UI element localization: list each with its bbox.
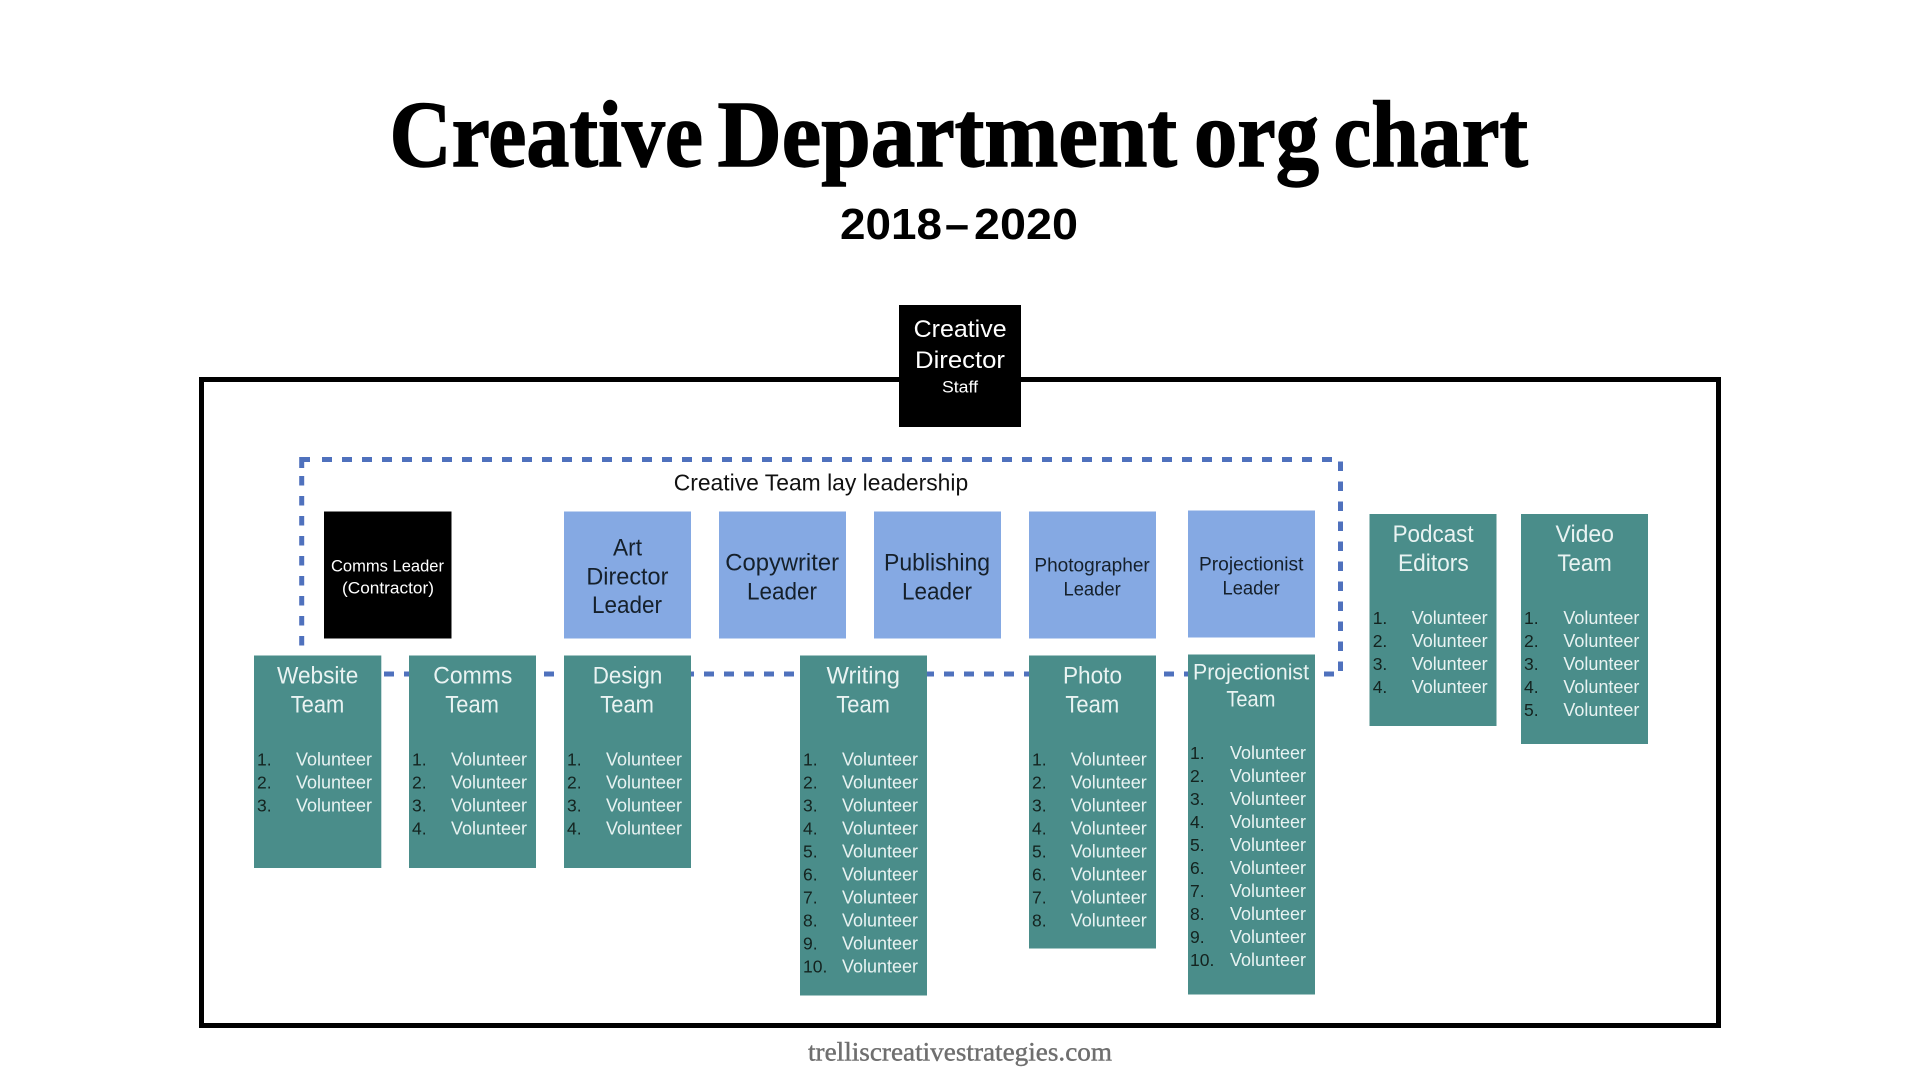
panel: Photo Team: Volunteer bbox=[1071, 841, 1147, 862]
panel: Writing Team: 5. bbox=[803, 842, 818, 862]
panel: Video Team: Volunteer bbox=[1563, 676, 1639, 697]
box: Projectionist Leader: Projectionist bbox=[1199, 555, 1304, 576]
panel: Photo Team: 5. bbox=[1032, 842, 1047, 862]
panel: Writing Team: Volunteer bbox=[842, 841, 918, 862]
panel: Podcast Editors: Volunteer bbox=[1412, 630, 1488, 651]
panel: Writing Team: Volunteer bbox=[842, 772, 918, 793]
panel: Video Team: 2. bbox=[1524, 631, 1539, 651]
panel: Design Team: 4. bbox=[567, 819, 582, 839]
panel: Photo Team: 6. bbox=[1032, 865, 1047, 885]
panel: Projectionist Team: Volunteer bbox=[1230, 903, 1306, 924]
box: Projectionist Leader: Leader bbox=[1222, 579, 1280, 600]
panel: Photo Team: Volunteer bbox=[1071, 887, 1147, 908]
subtitle: years bbox=[840, 200, 1078, 249]
panel: Design Team: Volunteer bbox=[606, 818, 682, 839]
panel: Podcast Editors: Editors bbox=[1398, 550, 1469, 577]
box: Creative Director: Staff bbox=[942, 378, 978, 396]
panel: Writing Team: 3. bbox=[803, 796, 818, 816]
box: Art Director Leader: Director bbox=[586, 563, 668, 590]
panel: Comms Team: Team bbox=[445, 691, 499, 718]
panel: Design Team bbox=[564, 656, 691, 868]
title: Department bbox=[718, 83, 1177, 187]
box: Comms Leader bbox=[324, 512, 452, 638]
panel: Website Team: Volunteer bbox=[296, 772, 372, 793]
panel: Writing Team: Volunteer bbox=[842, 956, 918, 977]
box: Creative Director bbox=[899, 305, 1021, 427]
subtitle: years: – bbox=[945, 200, 969, 249]
panel: Design Team: 1. bbox=[567, 750, 582, 770]
panel: Writing Team: 4. bbox=[803, 819, 818, 839]
panel: Projectionist Team bbox=[1188, 654, 1315, 994]
panel: Projectionist Team: Volunteer bbox=[1230, 880, 1306, 901]
title bbox=[390, 83, 1528, 187]
panel: Website Team: Website bbox=[277, 662, 358, 689]
panel: Podcast Editors: 1. bbox=[1373, 608, 1387, 628]
panel: Photo Team bbox=[1029, 656, 1156, 948]
panel: Projectionist Team: Volunteer bbox=[1230, 926, 1306, 947]
footer: website: trelliscreativestrategies.com bbox=[808, 1038, 1112, 1066]
panel: Podcast Editors: 2. bbox=[1373, 631, 1387, 651]
panel: Photo Team: 1. bbox=[1032, 750, 1047, 770]
panel: Design Team: Volunteer bbox=[606, 772, 682, 793]
panel: Video Team: Volunteer bbox=[1563, 653, 1639, 674]
box: Publishing Leader: Publishing bbox=[884, 550, 990, 576]
panel: Projectionist Team: 4. bbox=[1190, 812, 1205, 832]
panel: Comms Team: Volunteer bbox=[451, 772, 527, 793]
panel: Writing Team: Volunteer bbox=[842, 910, 918, 931]
panel: Comms Team: Comms bbox=[433, 662, 512, 689]
panel: Website Team: 3. bbox=[257, 796, 272, 816]
panel: Video Team: Volunteer bbox=[1563, 607, 1639, 628]
panel: Writing Team: Volunteer bbox=[842, 818, 918, 839]
title: Creative bbox=[390, 83, 703, 187]
box: Creative Director: Director bbox=[915, 347, 1005, 374]
panel: Video Team: 5. bbox=[1524, 700, 1539, 720]
panel: Writing Team: Volunteer bbox=[842, 795, 918, 816]
panel: Photo Team: Volunteer bbox=[1071, 749, 1147, 770]
box: Copywriter Leader: Leader bbox=[747, 579, 817, 606]
panel: Photo Team: Volunteer bbox=[1071, 864, 1147, 885]
panel: Projectionist Team: Volunteer bbox=[1230, 857, 1306, 878]
panel: Comms Team: 1. bbox=[412, 750, 427, 770]
panel: Projectionist Team: 8. bbox=[1190, 904, 1205, 924]
box: Creative Director: Creative bbox=[914, 316, 1007, 343]
panel: Video Team: 4. bbox=[1524, 677, 1539, 697]
panel: Podcast Editors: Volunteer bbox=[1412, 653, 1488, 674]
box: Photographer Leader: Leader bbox=[1064, 580, 1121, 600]
subtitle: years: 2020 bbox=[974, 200, 1078, 249]
panel: Writing Team: Volunteer bbox=[842, 864, 918, 885]
panel: Writing Team: Volunteer bbox=[842, 933, 918, 954]
panel: Projectionist Team: Volunteer bbox=[1230, 765, 1306, 786]
panel: Projectionist Team: 7. bbox=[1190, 881, 1205, 901]
panel: Projectionist Team: 3. bbox=[1190, 789, 1205, 809]
panel: Photo Team: 7. bbox=[1032, 888, 1047, 908]
panel: Writing Team: 9. bbox=[803, 934, 818, 954]
panel: Photo Team: Volunteer bbox=[1071, 818, 1147, 839]
panel: Photo Team: 8. bbox=[1032, 911, 1047, 931]
panel: Photo Team: Team bbox=[1065, 691, 1119, 718]
panel: Photo Team: Volunteer bbox=[1071, 772, 1147, 793]
panel: Design Team: Volunteer bbox=[606, 749, 682, 770]
box: Copywriter Leader: Copywriter bbox=[725, 550, 839, 576]
panel: Projectionist Team: Volunteer bbox=[1230, 834, 1306, 855]
box: Copywriter Leader bbox=[719, 512, 846, 638]
panel: Video Team: Volunteer bbox=[1563, 699, 1639, 720]
panel: Photo Team: Volunteer bbox=[1071, 910, 1147, 931]
panel: Projectionist Team: Projectionist bbox=[1193, 660, 1309, 685]
box: Art Director Leader bbox=[564, 512, 691, 638]
box: Art Director Leader: Art bbox=[613, 535, 642, 562]
panel: Comms Team: Volunteer bbox=[451, 749, 527, 770]
subtitle: years: 2018 bbox=[840, 200, 942, 249]
box: Photographer Leader: Photographer bbox=[1034, 556, 1150, 576]
panel: Podcast Editors: Podcast bbox=[1393, 521, 1474, 548]
title: chart bbox=[1334, 83, 1528, 187]
panel: Website Team: Volunteer bbox=[296, 749, 372, 770]
panel: Writing Team bbox=[800, 656, 927, 996]
panel: Projectionist Team: 6. bbox=[1190, 858, 1205, 878]
panel: Projectionist Team: Volunteer bbox=[1230, 742, 1306, 763]
panel: Website Team bbox=[254, 656, 381, 868]
panel: Website Team: 1. bbox=[257, 750, 272, 770]
panel: Projectionist Team: Team bbox=[1226, 687, 1275, 712]
panel: Writing Team: Volunteer bbox=[842, 749, 918, 770]
panel: Writing Team: 7. bbox=[803, 888, 818, 908]
panel: Writing Team: Team bbox=[836, 691, 890, 718]
panel: Podcast Editors: Volunteer bbox=[1412, 607, 1488, 628]
box: Comms Leader: Comms Leader bbox=[331, 558, 445, 576]
panel: Projectionist Team: 2. bbox=[1190, 766, 1205, 786]
panel: Writing Team: 8. bbox=[803, 911, 818, 931]
panel: Writing Team: 1. bbox=[803, 750, 818, 770]
panel: Website Team: 2. bbox=[257, 773, 272, 793]
panel: Projectionist Team: 5. bbox=[1190, 835, 1205, 855]
panel: Website Team: Team bbox=[291, 691, 344, 718]
panel: Comms Team: 4. bbox=[412, 819, 427, 839]
panel: Design Team: 3. bbox=[567, 796, 582, 816]
box: Comms Leader: (Contractor) bbox=[342, 580, 434, 598]
panel: Projectionist Team: Volunteer bbox=[1230, 949, 1306, 970]
panel: Photo Team: Photo bbox=[1063, 662, 1122, 689]
panel: Writing Team: Writing bbox=[826, 662, 900, 689]
panel: Design Team: Design bbox=[593, 662, 662, 689]
panel: Design Team: 2. bbox=[567, 773, 582, 793]
panel: Photo Team: Volunteer bbox=[1071, 795, 1147, 816]
title: org bbox=[1194, 83, 1319, 187]
panel: Website Team: Volunteer bbox=[296, 795, 372, 816]
panel: Projectionist Team: 1. bbox=[1190, 743, 1205, 763]
panel: Comms Team: 2. bbox=[412, 773, 427, 793]
panel: Projectionist Team: 10. bbox=[1190, 950, 1214, 970]
panel: Podcast Editors: 4. bbox=[1373, 677, 1387, 697]
box: Photographer Leader bbox=[1029, 512, 1156, 638]
box: Publishing Leader bbox=[874, 512, 1001, 638]
box: Publishing Leader: Leader bbox=[902, 579, 972, 606]
box: Art Director Leader: Leader bbox=[592, 592, 662, 619]
panel: Writing Team: Volunteer bbox=[842, 887, 918, 908]
panel: Design Team: Team bbox=[600, 691, 654, 718]
panel: Comms Team: 3. bbox=[412, 796, 427, 816]
panel: Photo Team: 3. bbox=[1032, 796, 1047, 816]
panel: Comms Team: Volunteer bbox=[451, 795, 527, 816]
panel: Projectionist Team: Volunteer bbox=[1230, 788, 1306, 809]
panel: Photo Team: 2. bbox=[1032, 773, 1047, 793]
panel: Video Team: 3. bbox=[1524, 654, 1539, 674]
panel: Podcast Editors bbox=[1370, 514, 1496, 726]
panel: Design Team: Volunteer bbox=[606, 795, 682, 816]
panel: Writing Team: 6. bbox=[803, 865, 818, 885]
dashed box: Creative Team lay leadership bbox=[302, 460, 1341, 674]
panel: Writing Team: 10. bbox=[803, 957, 827, 977]
panel: Podcast Editors: Volunteer bbox=[1412, 676, 1488, 697]
panel: Video Team: Video bbox=[1556, 521, 1614, 548]
panel: Projectionist Team: 9. bbox=[1190, 927, 1205, 947]
panel: Video Team bbox=[1521, 514, 1648, 744]
panel: Podcast Editors: 3. bbox=[1373, 654, 1387, 674]
panel: Comms Team bbox=[409, 656, 536, 868]
panel: Photo Team: 4. bbox=[1032, 819, 1047, 839]
panel: Writing Team: 2. bbox=[803, 773, 818, 793]
panel: Video Team: Team bbox=[1557, 550, 1612, 577]
panel: Comms Team: Volunteer bbox=[451, 818, 527, 839]
panel: Video Team: 1. bbox=[1524, 608, 1539, 628]
panel: Video Team: Volunteer bbox=[1563, 630, 1639, 651]
outer frame bbox=[202, 380, 1718, 1026]
box: Projectionist Leader bbox=[1188, 510, 1315, 638]
panel: Projectionist Team: Volunteer bbox=[1230, 811, 1306, 832]
label: Creative Team lay leadership: Creative Team lay leadership bbox=[674, 470, 968, 496]
